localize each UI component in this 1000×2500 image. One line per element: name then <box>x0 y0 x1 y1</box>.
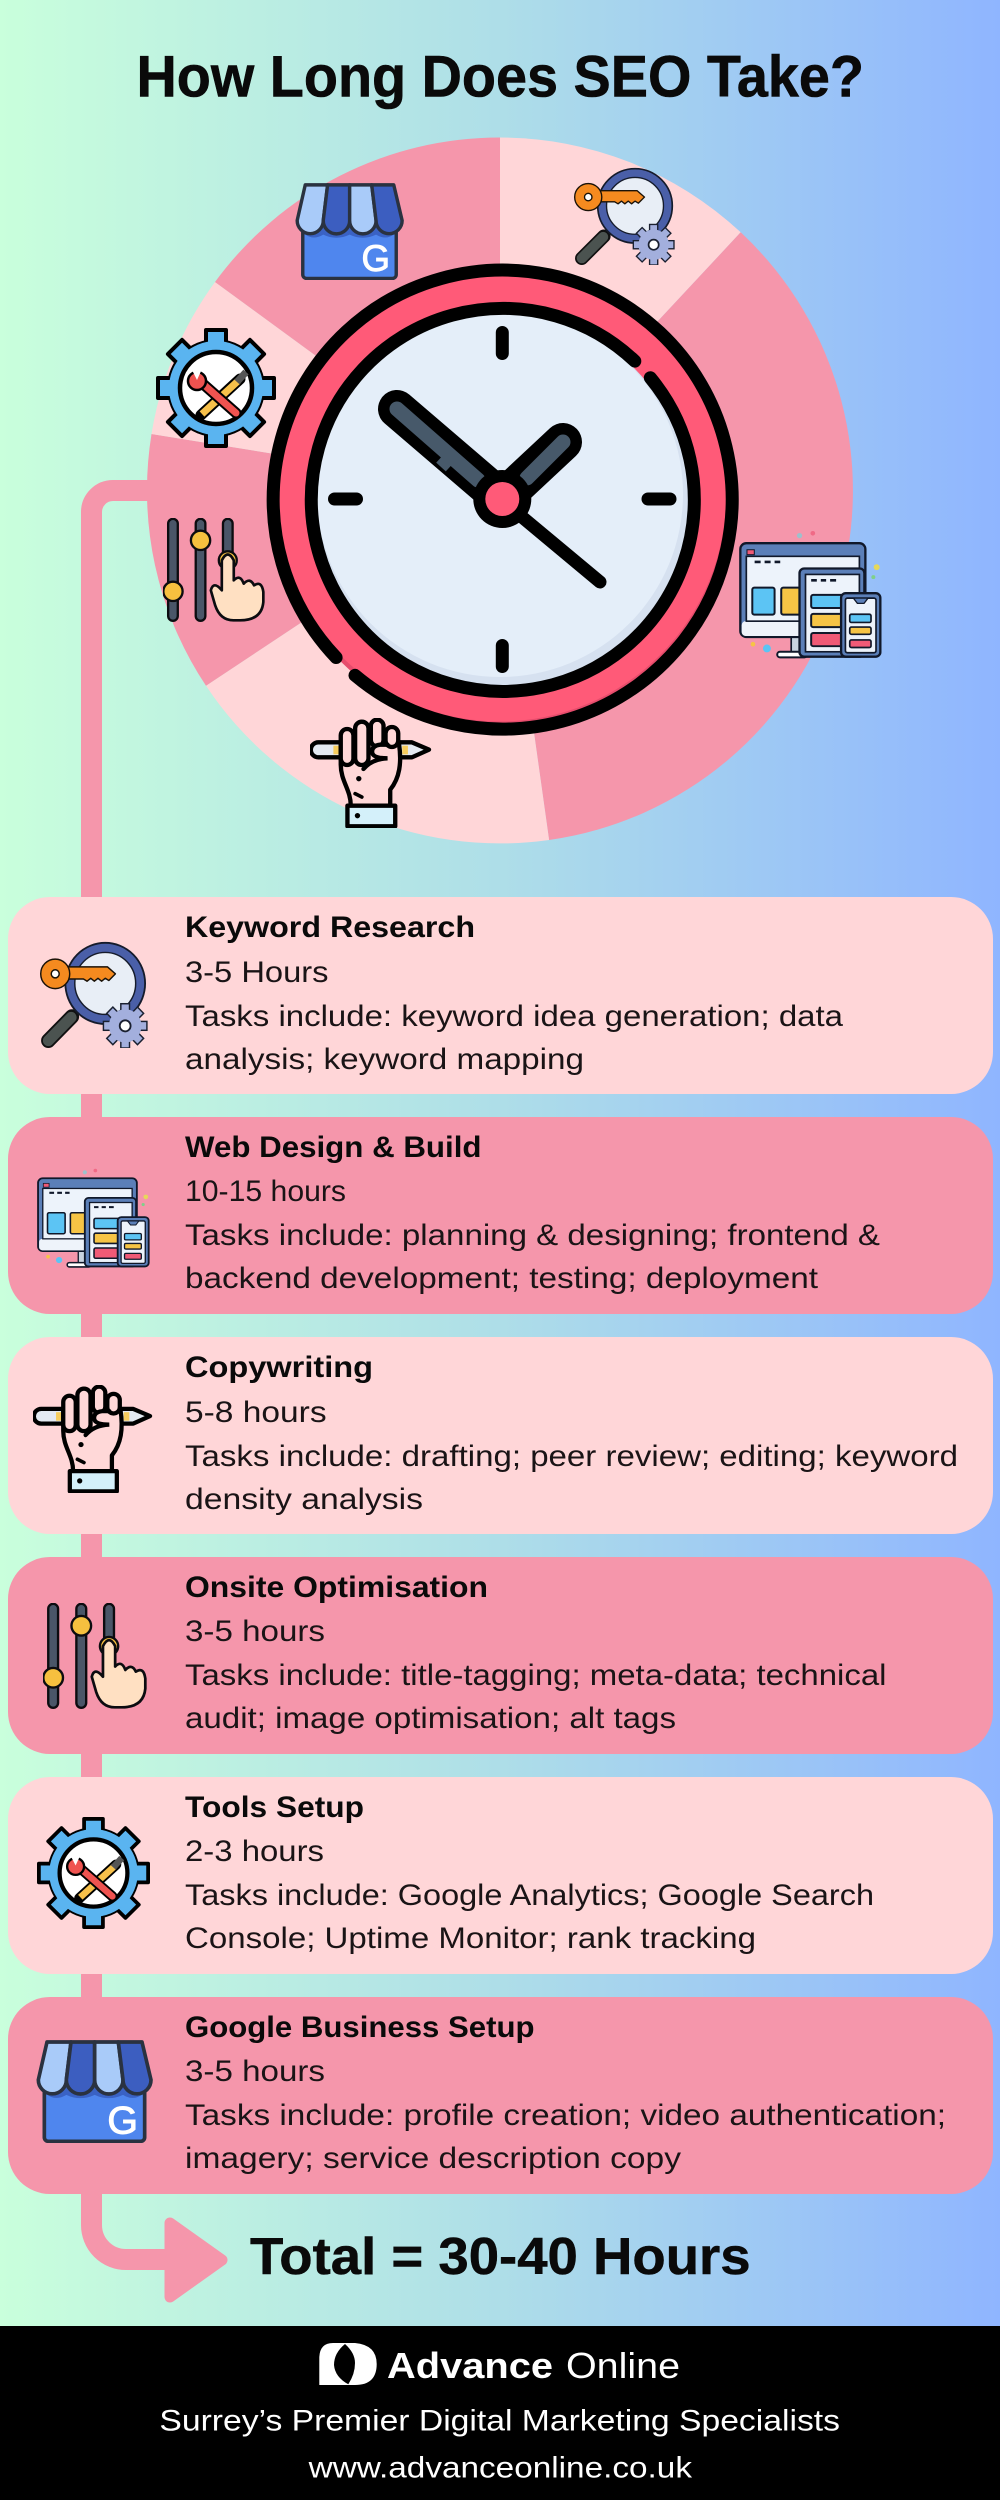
card background <box>8 897 993 1094</box>
footer band <box>0 2326 1000 2500</box>
tasks line 1: Tasks include: keyword idea generation; data <box>185 1000 843 1033</box>
icon: google business store <box>38 2042 151 2143</box>
tasks line 1: Tasks include: drafting; peer review; editing; keyword <box>185 1440 958 1473</box>
icon: magnifier with key <box>41 943 147 1048</box>
icon: hand holding pencil <box>34 1387 150 1491</box>
duration: 3-5 hours <box>185 2055 325 2088</box>
tasks line 2: analysis; keyword mapping <box>185 1043 584 1076</box>
panel: tools setup <box>8 1777 993 1974</box>
heading: Tools Setup <box>185 1791 364 1824</box>
heading: Copywriting <box>185 1351 373 1384</box>
tasks line 1: Tasks include: planning & designing; frontend & <box>185 1219 880 1252</box>
tasks line 2: backend development; testing; deployment <box>185 1262 819 1295</box>
icon: sliders with hand <box>163 524 263 620</box>
icon: gear with tools <box>158 330 274 446</box>
slice: google business <box>215 137 500 491</box>
card background <box>8 1117 993 1314</box>
slice: web design <box>500 232 853 840</box>
panel: google business setup <box>8 1997 993 2194</box>
tasks line 2: imagery; service description copy <box>185 2142 681 2175</box>
icon: sliders with hand <box>43 1609 145 1707</box>
panel: onsite optimisation <box>8 1557 993 1754</box>
duration: 2-3 hours <box>185 1835 324 1868</box>
total hours: Total = 30-40 Hours <box>250 2228 751 2286</box>
website: www.advanceonline.co.uk <box>308 2451 693 2484</box>
card background <box>8 1337 993 1534</box>
tasks line 2: density analysis <box>185 1483 423 1516</box>
arrow: timeline connector <box>92 490 222 2297</box>
duration: 3-5 hours <box>185 1615 325 1648</box>
logo wordmark: Online: Online <box>566 2345 680 2386</box>
tasks line 2: Console; Uptime Monitor; rank tracking <box>185 1922 756 1955</box>
tasks line 1: Tasks include: profile creation; video authentication; <box>185 2099 946 2132</box>
logo mark <box>319 2343 377 2385</box>
heading: Google Business Setup <box>185 2011 534 2044</box>
panel: keyword research <box>8 897 993 1094</box>
tagline: Surrey’s Premier Digital Marketing Specialists <box>159 2405 840 2438</box>
title: How Long Does SEO Take? <box>136 44 864 110</box>
icon: responsive web devices <box>38 1169 149 1267</box>
icon: magnifier with key <box>575 169 674 265</box>
tasks line 2: audit; image optimisation; alt tags <box>185 1702 676 1735</box>
slice: copywriting <box>206 490 549 843</box>
panel: web design and build <box>8 1117 993 1314</box>
duration: 5-8 hours <box>185 1396 327 1429</box>
tasks line 1: Tasks include: Google Analytics; Google Search <box>185 1879 874 1912</box>
logo wordmark: Advance: Advance <box>387 2345 553 2386</box>
slice: onsite optimisation <box>147 434 500 686</box>
footer background <box>0 2326 1000 2500</box>
card background <box>8 1997 993 2194</box>
slice: keyword research <box>500 138 741 490</box>
icon: clock <box>273 270 732 729</box>
tasks line 1: Tasks include: title-tagging; meta-data; technical <box>185 1659 886 1692</box>
icon: gear with tools <box>39 1819 148 1927</box>
duration: 10-15 hours <box>185 1175 346 1208</box>
icon: google business store <box>297 185 402 279</box>
heading: Web Design & Build <box>185 1131 482 1164</box>
slice: tools setup <box>152 282 500 490</box>
card background <box>8 1777 993 1974</box>
panel: copywriting <box>8 1337 993 1534</box>
duration: 3-5 Hours <box>185 956 328 989</box>
pie chart: task time slices <box>147 137 853 843</box>
icon: hand holding pencil <box>311 720 429 826</box>
icon: responsive web devices <box>740 531 880 657</box>
heading: Onsite Optimisation <box>185 1571 488 1604</box>
heading: Keyword Research <box>185 911 475 944</box>
card background <box>8 1557 993 1754</box>
